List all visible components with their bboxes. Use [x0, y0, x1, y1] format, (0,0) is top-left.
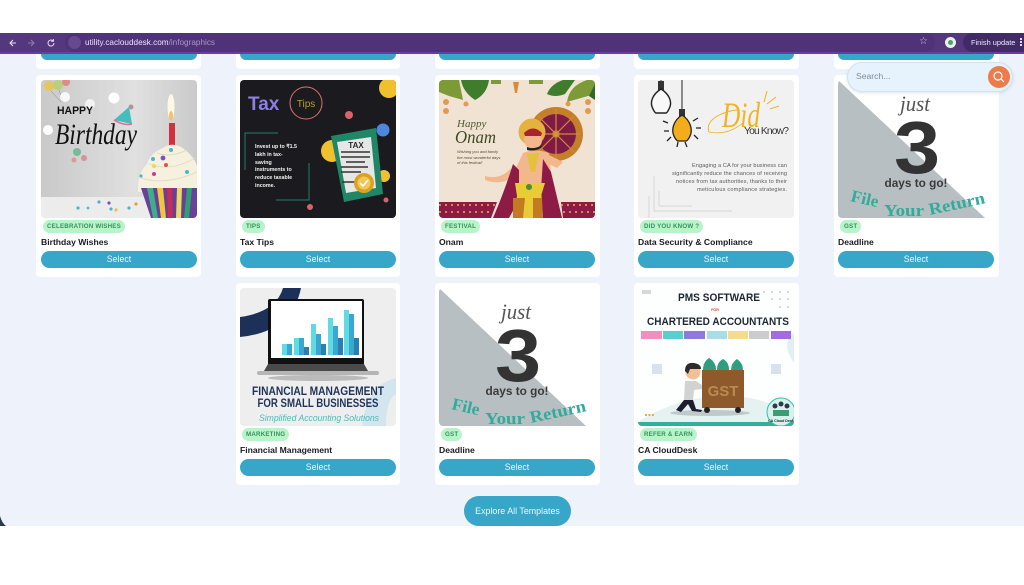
select button: Select — [505, 462, 529, 472]
image: deadline 3 days: just — [897, 91, 931, 116]
forward arrow — [28, 40, 35, 46]
category tag: REFER & EARN — [644, 431, 693, 438]
image: tax tips: income. — [255, 183, 276, 189]
select button: Select — [306, 462, 330, 472]
card title: Onam — [439, 237, 463, 247]
image: financial management laptop: Simplified Accounting Solutions — [259, 413, 379, 423]
image: pms software gst: GST — [708, 383, 738, 400]
search placeholder: Search... — [856, 71, 890, 81]
finish update button: Finish update — [971, 38, 1015, 47]
select button: Select — [505, 254, 529, 264]
image: did you know: meticulous compliance strategies. — [697, 187, 787, 193]
category tag — [441, 220, 480, 233]
category tag: TIPS — [246, 223, 261, 230]
card: deadline top — [834, 75, 999, 277]
select button — [240, 251, 396, 268]
explore all templates button: Explore All Templates — [475, 506, 560, 516]
image: onam festival: Wishing you and family — [457, 149, 499, 154]
select button: Select — [904, 254, 928, 264]
image: onam festival: the most wonderful days — [457, 155, 500, 160]
image: tax tips: saving — [255, 160, 272, 166]
finish update button — [963, 33, 1024, 52]
image: did you know: notices from tax authorities, thanks to their — [676, 179, 787, 185]
category tag — [441, 428, 462, 441]
category tag: FESTIVAL — [445, 223, 476, 230]
image: did you know: Engaging a CA for your business can — [692, 163, 787, 169]
explore all templates button — [464, 496, 571, 526]
card: onam — [435, 75, 600, 277]
corner of dark window edge — [0, 516, 6, 526]
search icon button — [988, 66, 1010, 88]
image: birthday cupcake: HAPPY — [57, 105, 94, 117]
category tag — [640, 220, 703, 233]
category tag: CELEBRATION WISHES — [47, 223, 121, 230]
url: utility.caclouddesk.com/infographics — [85, 38, 215, 47]
image: pms software gst — [638, 290, 794, 426]
select button: Select — [704, 462, 728, 472]
category tag — [840, 220, 861, 233]
star icon: ☆ — [919, 36, 928, 47]
address bar — [65, 33, 935, 52]
select button: Select — [704, 254, 728, 264]
image: tax tips: Tax — [248, 94, 280, 115]
image: tax tips: Invest up to ₹1.5 — [255, 144, 297, 150]
image: tax tips: Tips — [297, 99, 315, 110]
image: pms software gst: CHARTERED ACCOUNTANTS — [647, 316, 789, 328]
image: deadline 3 days: 3 — [894, 106, 940, 189]
image: deadline 3 days: File — [849, 186, 881, 211]
select button — [41, 251, 197, 268]
image: tax tips: lakh in tax- — [255, 152, 283, 158]
image: deadline 3 days: File — [450, 394, 482, 419]
profile icon — [945, 37, 956, 48]
image: tax tips: instruments to — [255, 167, 293, 173]
image: deadline 3 days — [838, 81, 987, 218]
category tag: DID YOU KNOW ? — [644, 223, 699, 230]
image: pms software gst: CA Cloud Desk — [768, 419, 794, 423]
menu dots — [1020, 38, 1022, 40]
card: tax tips — [236, 75, 400, 277]
image: pms software gst: PMS SOFTWARE — [678, 292, 760, 304]
select button — [439, 251, 595, 268]
image: onam festival — [439, 80, 595, 218]
image: deadline 3 days: just — [498, 299, 532, 324]
card title: Deadline — [439, 445, 475, 455]
image: tax tips: TAX — [348, 141, 364, 150]
card title: Data Security & Compliance — [638, 237, 753, 247]
category tag — [242, 428, 289, 441]
image: tax tips — [240, 80, 396, 218]
image: pms software gst: FOR — [711, 308, 719, 312]
image: did you know: You Know? — [744, 126, 789, 137]
card title: Financial Management — [240, 445, 332, 455]
card title: Deadline — [838, 237, 874, 247]
image: did you know — [638, 80, 794, 218]
image: birthday cupcake — [41, 80, 197, 218]
card: deadline bottom — [435, 283, 600, 485]
image: onam festival: Happy — [456, 118, 486, 130]
reload icon — [48, 39, 54, 46]
card title: Birthday Wishes — [41, 237, 108, 247]
category tag: MARKETING — [246, 431, 285, 438]
image: did you know: significantly reduce the chances of receiving — [672, 171, 787, 177]
card: birthday wishes — [36, 75, 201, 277]
image: financial management laptop — [240, 288, 396, 426]
select button — [240, 459, 396, 476]
category tag — [43, 220, 125, 233]
site icon — [68, 36, 81, 49]
card: data security — [634, 75, 799, 277]
image: birthday cupcake: Birthday — [55, 118, 138, 151]
image: deadline 3 days: days to go! — [486, 384, 548, 398]
category tag: GST — [445, 431, 458, 438]
image: deadline 3 days — [439, 289, 588, 426]
image: did you know: Did — [721, 95, 761, 135]
back arrow — [9, 40, 16, 46]
category tag — [640, 428, 697, 441]
select button: Select — [107, 254, 131, 264]
card title: CA CloudDesk — [638, 445, 697, 455]
image: onam festival: Onam — [455, 127, 496, 147]
browser toolbar — [0, 33, 1024, 54]
select button: Select — [306, 254, 330, 264]
image: tax tips: reduce taxable — [255, 175, 292, 181]
category tag: GST — [844, 223, 857, 230]
image: deadline 3 days: 3 — [495, 314, 541, 397]
select button — [638, 251, 794, 268]
card title: Tax Tips — [240, 237, 274, 247]
category tag — [242, 220, 265, 233]
select button — [638, 459, 794, 476]
select button — [838, 251, 994, 268]
search box — [847, 62, 1013, 92]
image: onam festival: of this festival! — [457, 160, 483, 165]
card: ca clouddesk — [634, 283, 799, 485]
card: financial management — [236, 283, 400, 485]
select button — [439, 459, 595, 476]
partial card row above — [36, 54, 999, 69]
image: deadline 3 days: days to go! — [885, 176, 947, 190]
